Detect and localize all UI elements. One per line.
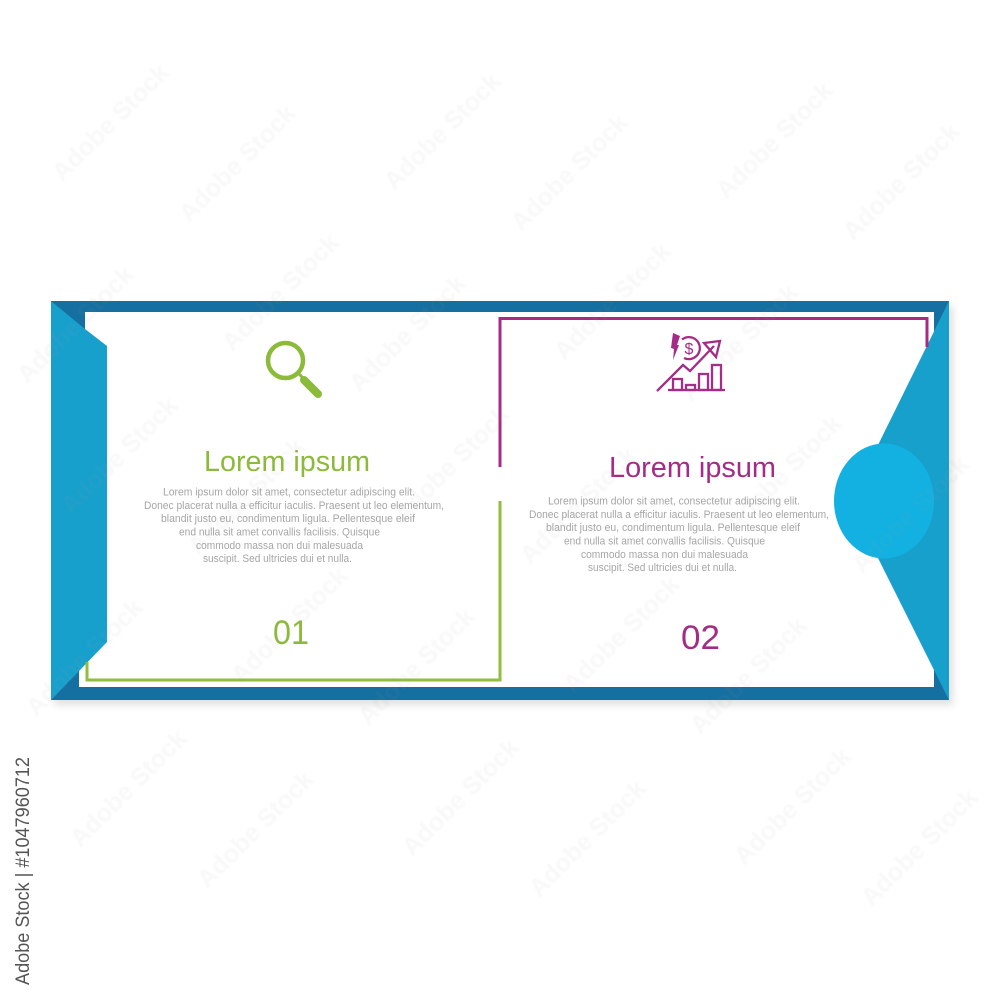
watermarks: Adobe Stock	[47, 59, 175, 186]
watermarks: Adobe Stock	[856, 784, 984, 911]
watermarks: Adobe Stock	[344, 270, 472, 397]
blue circle	[834, 444, 934, 558]
watermarks: Adobe Stock	[217, 229, 345, 356]
text block 2: Lorem ipsum dolor sit amet, consectetur adipiscing elit.	[548, 496, 800, 508]
icon: growth chart with dollar coin	[657, 333, 725, 391]
text block 2	[529, 496, 829, 574]
watermarks: Adobe Stock	[729, 743, 857, 870]
text block 1: end nulla sit amet convallis facilisis. Quisque	[179, 526, 380, 538]
watermarks: Adobe Stock	[226, 562, 354, 689]
text block 1: Donec placerat nulla a efficitur iaculis. Praesent ut leo elementum,	[144, 500, 444, 512]
watermarks: Adobe Stock	[685, 612, 813, 739]
inner white panel	[79, 312, 934, 687]
stock credit: Adobe Stock | #1047960712	[13, 757, 34, 985]
watermarks: Adobe Stock	[506, 109, 634, 236]
watermarks: Adobe Stock	[524, 775, 652, 902]
icon: magnifying glass	[268, 343, 318, 394]
watermarks: Adobe Stock	[183, 433, 311, 560]
number 02: 02	[681, 619, 720, 657]
panel 2 outline	[500, 318, 927, 467]
text block 1: Lorem ipsum dolor sit amet, consectetur adipiscing elit.	[163, 486, 415, 498]
watermarks: Adobe Stock	[379, 68, 507, 195]
watermarks: Adobe Stock	[720, 410, 848, 537]
text block 2: end nulla sit amet convallis facilisis. Quisque	[564, 536, 765, 548]
text block 2: blandit justo eu, condimentum ligula. Pellentesque eleif	[546, 522, 801, 534]
frame: dark blue border	[51, 301, 949, 700]
watermarks: Adobe Stock	[515, 442, 643, 569]
text block 1	[144, 486, 444, 565]
text block 2: commodo massa non dui malesuada	[581, 549, 749, 561]
watermarks: Adobe Stock	[397, 734, 525, 861]
watermarks: Adobe Stock	[711, 77, 839, 204]
watermarks: Adobe Stock	[174, 100, 302, 227]
watermarks: Adobe Stock	[388, 401, 516, 528]
watermarks: Adobe Stock	[549, 238, 677, 365]
number 01: 01	[273, 614, 309, 652]
watermarks: Adobe Stock	[21, 594, 149, 721]
text block 1: commodo massa non dui malesuada	[196, 540, 364, 552]
text block 2: Donec placerat nulla a efficitur iaculis. Praesent ut leo elementum,	[529, 509, 829, 521]
watermarks: Adobe Stock	[12, 261, 140, 388]
watermarks: Adobe Stock	[192, 766, 320, 893]
watermarks: Adobe Stock	[847, 451, 975, 578]
panel 1 outline	[87, 501, 500, 680]
text block 1: blandit justo eu, condimentum ligula. Pellentesque eleif	[161, 513, 416, 525]
watermarks: Adobe Stock	[65, 725, 193, 852]
watermarks: Adobe Stock	[353, 603, 481, 730]
text block 2: suscipit. Sed ultricies dui et nulla.	[588, 562, 737, 574]
heading 1: Lorem ipsum	[204, 446, 370, 478]
heading 2: Lorem ipsum	[609, 452, 776, 484]
icon: growth chart with dollar coin: $	[685, 341, 694, 358]
left blue ribbon	[51, 301, 107, 700]
frame shadow	[54, 306, 953, 705]
right blue triangle	[878, 301, 949, 700]
watermarks: Adobe Stock	[558, 571, 686, 698]
watermarks: Adobe Stock	[676, 279, 804, 406]
watermarks: Adobe Stock	[56, 392, 184, 519]
watermarks: Adobe Stock	[838, 118, 966, 245]
text block 1: suscipit. Sed ultricies dui et nulla.	[203, 553, 352, 565]
